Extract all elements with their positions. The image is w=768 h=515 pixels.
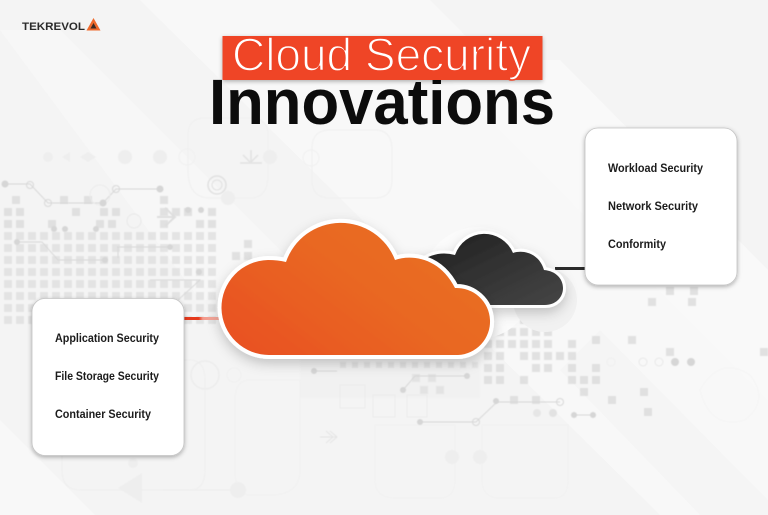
panel: right card [585, 128, 737, 285]
connector: red line to left card [184, 317, 226, 320]
panel: left card [32, 298, 184, 456]
background: circuit nodes [2, 150, 695, 503]
background: square grid left [0, 196, 252, 328]
title highlight bar [222, 36, 542, 80]
background: square grid centre [300, 287, 768, 416]
orange cloud [221, 223, 490, 355]
item: Network Security: Network Security [608, 201, 699, 213]
logo icon [86, 18, 100, 30]
background: circuit traces [5, 118, 759, 498]
title line 1: Cloud Security [232, 28, 531, 80]
item: Application Security: Application Security [55, 333, 160, 345]
title: Cloud Security [222, 28, 542, 80]
logo wordmark: TEKREVOL [22, 21, 85, 33]
logo [22, 18, 100, 33]
dark cloud [420, 227, 577, 339]
item: File Storage Security: File Storage Security [55, 371, 160, 383]
item: Conformity: Conformity [608, 239, 667, 251]
connector: dark line to right card [555, 267, 587, 270]
item: Container Security: Container Security [55, 409, 152, 421]
item: Workload Security: Workload Security [608, 163, 704, 175]
title: Innovations: Innovations [209, 66, 555, 138]
